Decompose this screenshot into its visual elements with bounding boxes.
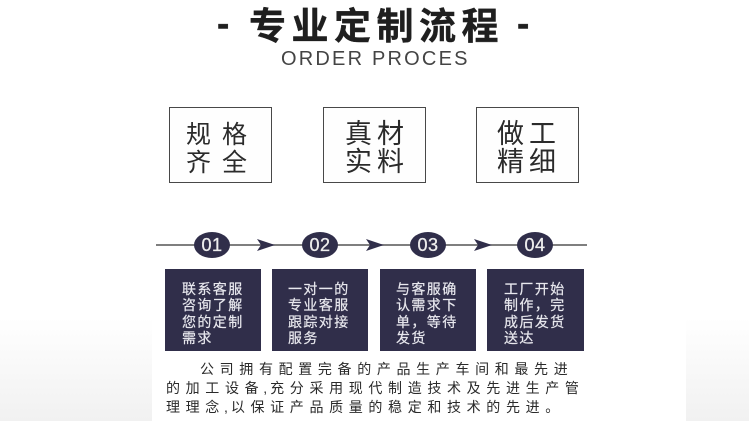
feature text: 真材 xyxy=(345,119,409,149)
step 3 text: 单，等待 xyxy=(396,314,458,330)
step 1 text: 您的定制 xyxy=(182,314,244,330)
description paragraph xyxy=(166,361,585,415)
feature text: 精细 xyxy=(497,147,561,177)
feature text: 齐全 xyxy=(186,149,258,177)
step 4 text: 成后发货 xyxy=(504,314,566,330)
title: - xyxy=(517,3,529,44)
step 01: 01 xyxy=(201,235,223,255)
step 4 text: 送达 xyxy=(504,330,535,346)
step 02 xyxy=(302,232,338,258)
panel: feature 真材实料 xyxy=(323,107,426,183)
panel: feature 做工精细 xyxy=(476,107,579,183)
step 1 text: 联系客服 xyxy=(182,281,244,297)
step 1 text xyxy=(182,281,244,346)
panel: step 1 card xyxy=(165,269,261,351)
step 03: 03 xyxy=(417,235,439,255)
step 2 text: 专业客服 xyxy=(288,297,350,313)
feature text: 规格 xyxy=(186,121,258,149)
step 4 text: 制作，完 xyxy=(504,297,566,313)
timeline with numbered steps and arrows xyxy=(156,232,587,258)
description paragraph: 理理念,以保证产品质量的稳定和技术的先进。 xyxy=(166,399,565,415)
panel: step 4 card xyxy=(487,269,584,351)
arrow 1 xyxy=(257,239,275,251)
step 3 text: 与客服确 xyxy=(396,281,458,297)
step 01 xyxy=(194,232,230,258)
arrow 3 xyxy=(474,239,492,251)
step 4 text xyxy=(504,281,566,346)
feature text xyxy=(186,121,258,177)
panel: step 3 card xyxy=(380,269,476,351)
background: left grey fade xyxy=(0,300,152,421)
step 2 text: 跟踪对接 xyxy=(288,314,350,330)
feature text: 实料 xyxy=(345,147,409,177)
step 3 text xyxy=(396,281,458,346)
step 04: 04 xyxy=(524,235,546,255)
step 04 xyxy=(517,232,553,258)
panel: feature 规格齐全 xyxy=(169,107,272,183)
arrow 2 xyxy=(366,239,384,251)
step 2 text: 服务 xyxy=(288,330,319,346)
feature text: 做工 xyxy=(497,119,561,149)
description paragraph: 公司拥有配置完备的产品生产车间和最先进 xyxy=(200,361,573,377)
feature text xyxy=(497,119,561,177)
step 4 text: 工厂开始 xyxy=(504,281,566,297)
step 2 text xyxy=(288,281,350,346)
step 3 text: 认需求下 xyxy=(396,297,458,313)
step 1 text: 咨询了解 xyxy=(182,297,244,313)
step 2 text: 一对一的 xyxy=(288,281,350,297)
title: 专业定制流程 xyxy=(249,6,504,47)
subtitle: ORDER PROCES xyxy=(281,48,470,70)
feature text xyxy=(345,119,409,177)
step 03 xyxy=(410,232,446,258)
step 02: 02 xyxy=(309,235,331,255)
background: right grey fade xyxy=(686,300,749,421)
step 3 text: 发货 xyxy=(396,330,427,346)
step 1 text: 需求 xyxy=(182,330,213,346)
description paragraph: 的加工设备,充分采用现代制造技术及先进生产管 xyxy=(166,380,585,396)
panel: step 2 card xyxy=(272,269,368,351)
title: - xyxy=(217,3,229,44)
